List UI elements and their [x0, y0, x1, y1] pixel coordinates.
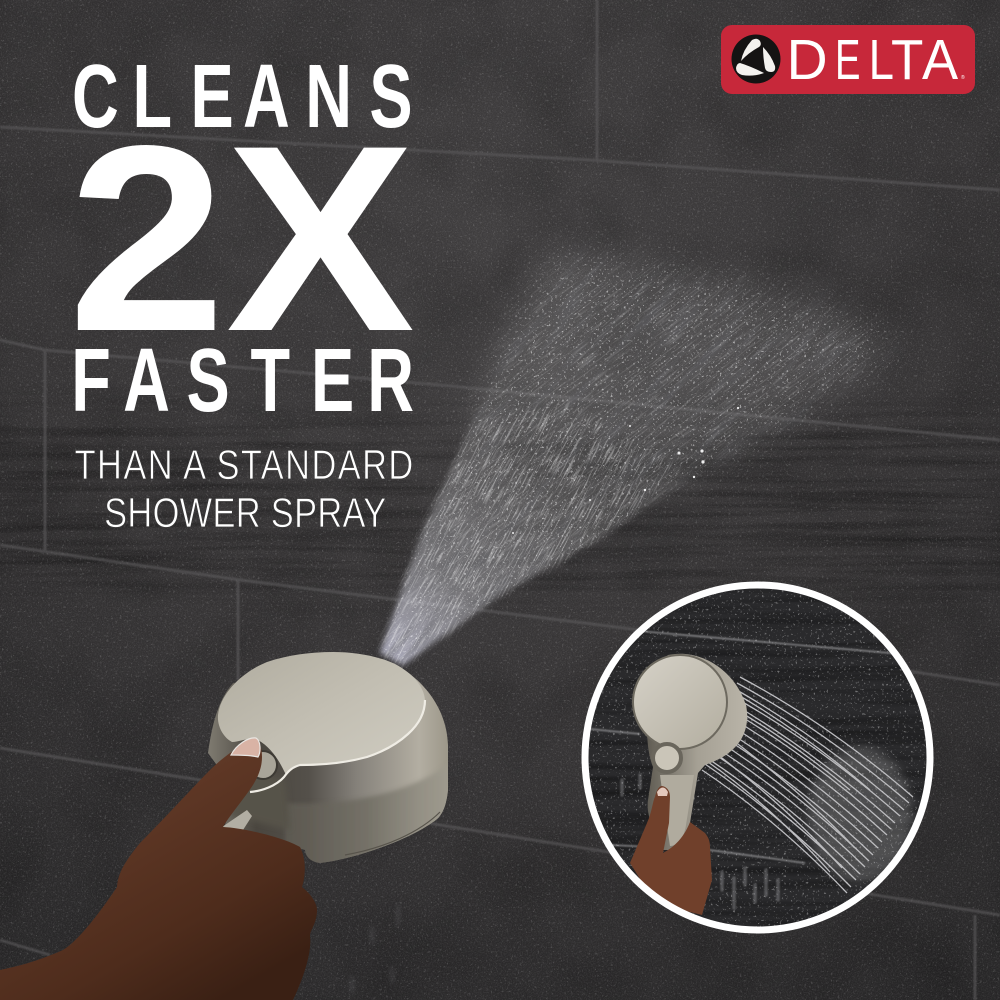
- registered mark: ®: [961, 74, 965, 81]
- water mist spray: [376, 238, 907, 669]
- dark handle shadow: [230, 770, 290, 830]
- logo wordmark: A: [922, 28, 958, 91]
- inset showerhead back: [647, 654, 747, 850]
- logo red badge: [721, 25, 975, 94]
- headline: faster: FASTER: [71, 330, 414, 431]
- inset wall drips: [622, 775, 778, 908]
- showerhead (main): [208, 652, 450, 870]
- inset hand: [630, 786, 712, 915]
- hand pressing button: [0, 738, 317, 1000]
- inset mist at stream ends: [808, 747, 912, 883]
- handle stub: [222, 810, 252, 830]
- showerhead rim groove: [345, 812, 440, 855]
- headline: [68, 46, 416, 537]
- inset button: [653, 744, 681, 772]
- headline: 2X: 2X: [68, 91, 416, 387]
- showerhead top face: [218, 652, 425, 775]
- inset background: [586, 586, 930, 930]
- logo wordmark: D: [786, 28, 828, 92]
- thumbnail: [231, 738, 260, 757]
- logo wordmark: E: [835, 28, 860, 92]
- inset showerhead face: [633, 655, 727, 749]
- brand logo: [721, 25, 975, 94]
- face highlight rim: [250, 700, 425, 792]
- logo wordmark: L: [869, 27, 894, 91]
- bright droplets: [512, 407, 739, 534]
- inset white ring: [585, 585, 930, 930]
- logo wordmark: [786, 27, 958, 92]
- subheading line 2: SHOWER SPRAY: [104, 490, 386, 537]
- subheading line 1: THAN A STANDARD: [75, 442, 413, 489]
- logo wordmark: T: [891, 27, 923, 91]
- inset thumbnail: [657, 788, 668, 796]
- headline: cleans: CLEANS: [72, 46, 413, 147]
- inset photo circle: [585, 585, 930, 930]
- showerhead lower band: [286, 773, 448, 863]
- showerhead body: [208, 663, 448, 863]
- push button: [249, 751, 277, 779]
- inset water streams: [702, 677, 913, 893]
- spray cone: [377, 256, 884, 668]
- hand: [0, 740, 317, 1000]
- logo emblem: [732, 34, 780, 84]
- inset handle highlight: [660, 775, 694, 846]
